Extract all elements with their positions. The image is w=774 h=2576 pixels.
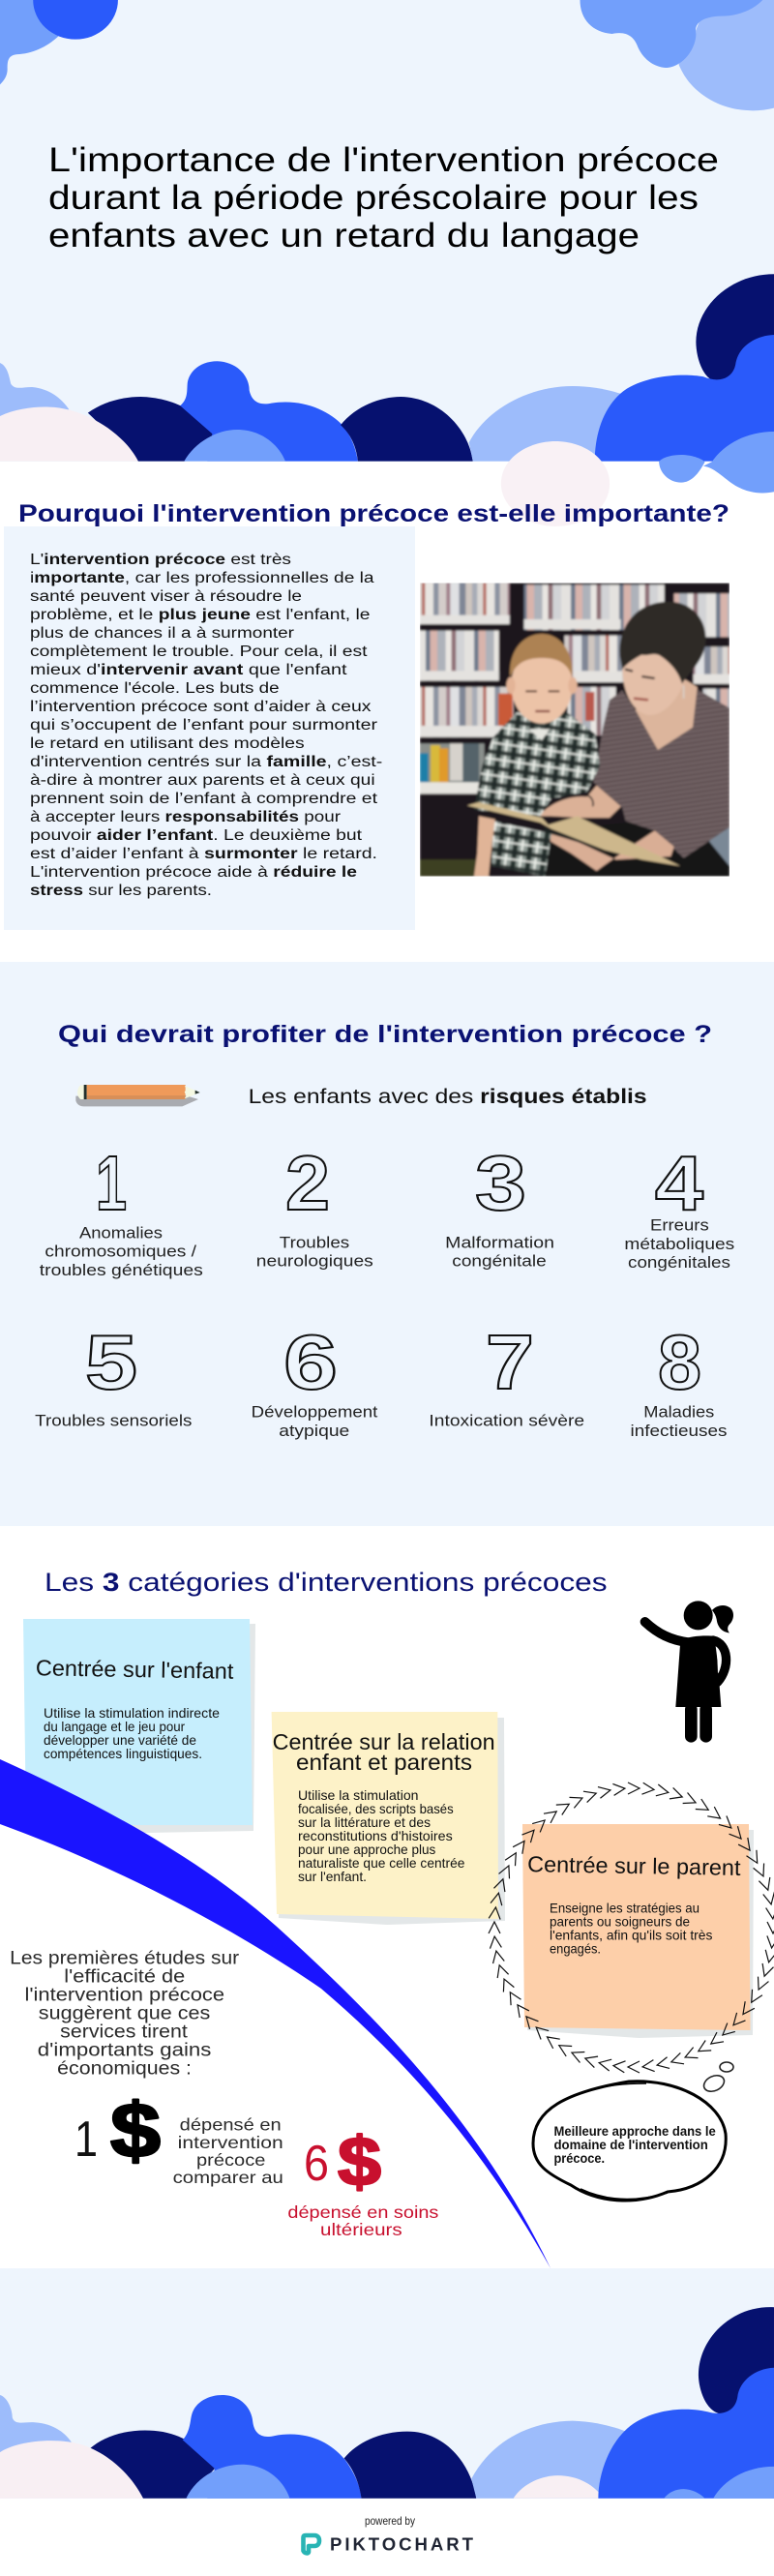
subheading: risques établis: Les enfants avec des risques établis xyxy=(249,1086,647,1108)
risk 5: 5 xyxy=(85,1319,137,1405)
panel: pourquoi text: complètement le trouble. Pour cela, il est xyxy=(30,644,368,660)
risk 7: 7 xyxy=(486,1319,534,1405)
boy xyxy=(474,708,600,816)
panel: pourquoi text: prennent soin de l’enfant à comprendre et xyxy=(30,791,378,807)
text block: premières études: d'importants gains xyxy=(38,2040,211,2061)
note: centrée sur l'enfant xyxy=(23,1619,255,1833)
book xyxy=(546,828,580,843)
panel: pourquoi text: l’intervention précoce sont d’aider à ceux xyxy=(30,699,372,715)
callout: thought bubble: Meilleure approche dans le xyxy=(553,2123,716,2139)
main title: L'importance de l'intervention précoce xyxy=(48,141,719,179)
text block: premières études: l'efficacité de xyxy=(64,1966,185,1988)
panel: pourquoi text: L'intervention précoce est très xyxy=(30,552,291,568)
statistic: 6 dollars: dépensé en soins xyxy=(287,2202,439,2222)
risk 4 xyxy=(624,1140,734,1272)
note: centrée sur l'enfant: du langage et le jeu pour xyxy=(44,1719,185,1734)
panel: pourquoi text: L'intervention précoce aide à réduire le xyxy=(30,864,357,881)
footer: piktochart branding xyxy=(304,2514,474,2555)
note: centrée sur la relation: Centrée sur la relation xyxy=(273,1729,495,1754)
section heading: qui devrait: Qui devrait profiter de l'intervention précoce ? xyxy=(58,1021,712,1048)
hero section xyxy=(0,0,774,526)
statistic: 1 dollar: dépensé en xyxy=(180,2115,282,2135)
text block: premières études: services tirent xyxy=(60,2022,189,2042)
main title xyxy=(48,141,719,255)
section heading: pourquoi: Pourquoi l'intervention précoce est-elle importante? xyxy=(18,500,729,527)
hero blobs xyxy=(0,0,774,526)
statistic: 6 dollars: $ xyxy=(338,2124,381,2201)
note: centrée sur la relation: reconstitutions d'histoires xyxy=(298,1828,453,1843)
text block: premières études: suggèrent que ces xyxy=(39,2003,210,2024)
note: centrée sur la relation: sur la littérature et des xyxy=(298,1814,431,1830)
risk 1: chromosomiques / xyxy=(45,1243,196,1260)
note: centrée sur le parent: l'enfants, afin qu'ils soit très xyxy=(550,1928,712,1943)
statistic: 6 dollars: ultérieurs xyxy=(320,2220,402,2239)
note: centrée sur la relation: pour une approche plus xyxy=(298,1842,435,1857)
icon: pencil xyxy=(75,1085,200,1106)
risk 3: 3 xyxy=(475,1140,526,1226)
swoosh: blue curve xyxy=(0,1759,551,2268)
risk 3: Malformation xyxy=(445,1235,554,1252)
statistic: 1 dollar: 1 xyxy=(74,2112,98,2168)
risk 8 xyxy=(631,1319,728,1440)
panel: pourquoi text: problème, et le plus jeune est l'enfant, le xyxy=(30,607,370,623)
risk 1: 1 xyxy=(96,1140,127,1226)
note: centrée sur la relation: enfant et parents xyxy=(296,1750,472,1775)
statistic: 1 dollar: $ xyxy=(110,2087,161,2173)
risk 3: congénitale xyxy=(452,1252,547,1270)
woman xyxy=(546,828,729,877)
text block: premières études: économiques : xyxy=(57,2059,192,2079)
statistic: 1 dollar: précoce xyxy=(196,2150,265,2170)
statistic: 1 dollar: intervention xyxy=(178,2133,283,2152)
panel: pourquoi text: est d’aider l’enfant à surmonter le retard. xyxy=(30,846,377,862)
panel: pourquoi text xyxy=(4,526,415,930)
risk 6: atypique xyxy=(279,1423,349,1440)
risk 4: Erreurs xyxy=(650,1217,709,1235)
note: centrée sur la relation: Utilise la stimulation xyxy=(298,1787,418,1803)
text block: premières études: Les premières études sur xyxy=(10,1949,240,1968)
note: centrée sur la relation: naturaliste que celle centrée xyxy=(298,1855,465,1871)
risk 4: métaboliques xyxy=(624,1236,734,1253)
statistic: 1 dollar xyxy=(74,2087,283,2187)
text block: premières études: l'intervention précoce xyxy=(25,1986,224,2005)
risk 2: Troubles xyxy=(280,1235,349,1252)
section heading: 3 catégories: Les 3 catégories d'interventions précoces xyxy=(45,1568,608,1597)
chevron ring around parent note xyxy=(489,1782,774,2073)
risk 1: Anomalies xyxy=(79,1225,163,1243)
note: centrée sur le parent: Centrée sur le parent xyxy=(527,1851,741,1880)
callout: thought bubble: précoce. xyxy=(553,2150,605,2166)
note: centrée sur l'enfant: Utilise la stimulation indirecte xyxy=(44,1705,220,1721)
risk 1: troubles génétiques xyxy=(40,1262,203,1279)
risk 2: 2 xyxy=(285,1140,330,1226)
risk 7 xyxy=(429,1319,584,1429)
risk 6: 6 xyxy=(283,1319,338,1405)
panel: pourquoi text: santé peuvent viser à résoudre le xyxy=(30,588,302,605)
panel: pourquoi text: d'intervention centrés sur la famille , c’est- xyxy=(30,754,382,770)
risk 4: 4 xyxy=(655,1140,704,1226)
note: centrée sur le parent xyxy=(522,1824,754,2038)
photo: woman reading a book with a boy xyxy=(420,583,729,877)
risk 8: Maladies xyxy=(643,1403,714,1421)
note: centrée sur l'enfant: compétences linguistiques. xyxy=(44,1746,202,1761)
risk 5: Troubles sensoriels xyxy=(35,1412,192,1429)
note: centrée sur le parent: parents ou soigneurs de xyxy=(550,1914,690,1930)
risk 7: Intoxication sévère xyxy=(429,1412,584,1429)
panel: pourquoi text: commence l'école. Les buts de xyxy=(30,680,280,697)
risk 2 xyxy=(256,1140,373,1270)
callout: thought bubble: domaine de l'intervention xyxy=(553,2137,708,2152)
panel: pourquoi text: qui s’occupent de l’enfant pour surmonter xyxy=(30,717,377,734)
panel: pourquoi text: mieux d' intervenir avant que l'enfant xyxy=(30,662,347,678)
risk 8: 8 xyxy=(658,1319,701,1405)
note: centrée sur la relation xyxy=(272,1712,505,1925)
statistic: 1 dollar: comparer au xyxy=(173,2168,283,2187)
risk 1 xyxy=(40,1140,203,1279)
risk 6: Développement xyxy=(252,1403,378,1421)
main title: enfants avec un retard du langage xyxy=(48,217,640,255)
panel: pourquoi text: pouvoir aider l’enfant . Le deuxième but xyxy=(30,827,363,844)
footer: piktochart branding: PIKTOCHART xyxy=(330,2534,474,2555)
risk 6 xyxy=(252,1319,378,1440)
note: centrée sur le parent: engagés. xyxy=(550,1941,601,1957)
statistic: 6 dollars xyxy=(287,2124,439,2239)
note: centrée sur la relation: focalisée, des scripts basés xyxy=(298,1801,454,1816)
note: centrée sur la relation: sur l'enfant. xyxy=(298,1869,367,1884)
risk 8: infectieuses xyxy=(631,1423,728,1440)
note: centrée sur le parent: Enseigne les stratégies au xyxy=(550,1901,700,1916)
panel: pourquoi text: plus de chances il a à surmonter xyxy=(30,625,294,642)
risk 4: congénitales xyxy=(628,1254,730,1272)
hero background xyxy=(0,0,774,462)
panel: pourquoi text: le retard en utilisant des modèles xyxy=(30,735,305,752)
risk 2: neurologiques xyxy=(256,1252,373,1270)
bottom decorative band xyxy=(0,2268,774,2499)
risk 5 xyxy=(35,1319,192,1429)
note: centrée sur l'enfant: Centrée sur l'enfant xyxy=(36,1655,234,1684)
callout: thought bubble xyxy=(533,2062,733,2201)
statistic: 6 dollars: 6 xyxy=(304,2136,329,2192)
panel: pourquoi text: importante , car les professionnelles de la xyxy=(30,570,374,586)
main title: durant la période préscolaire pour les xyxy=(48,179,699,217)
panel: pourquoi text: à-dire à montrer aux parents et à ceux qui xyxy=(30,772,375,789)
section background: qui devrait profiter xyxy=(0,962,774,1526)
panel: pourquoi text: stress sur les parents. xyxy=(30,883,212,899)
icon: girl pointing xyxy=(645,1601,733,1743)
footer: piktochart branding: powered by xyxy=(365,2514,415,2528)
text block: premières études xyxy=(10,1949,240,2079)
note: centrée sur l'enfant: développer une variété de xyxy=(44,1732,196,1748)
panel: pourquoi text: à accepter leurs responsabilités pour xyxy=(30,809,341,825)
risk 3 xyxy=(445,1140,554,1270)
